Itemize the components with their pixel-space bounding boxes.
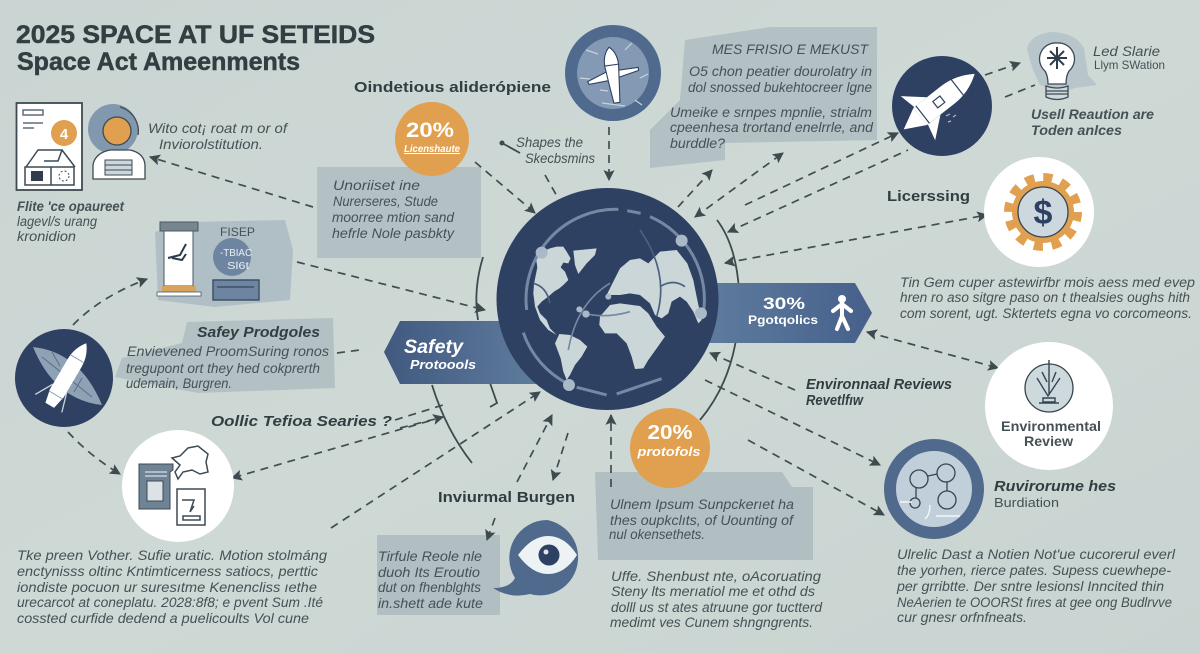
solid arcs around globe [432,220,739,463]
text: lower centre paragraph: dolll us st ates atruune gor tuctterd [611,600,822,615]
document icon with number badge: 4 [60,126,69,143]
banner: 30% protocols: 30% [763,294,805,313]
text: shapes label: Skecbsmins [525,151,595,166]
icon: light bulb [1027,32,1097,100]
text: top right panel: dol snossed bukehtocreer lgne [688,80,872,95]
text: bulb label: Llym SWation [1094,58,1165,72]
icon: right rocket [887,52,992,156]
icon: environmental review circle: Environmental [1001,418,1101,434]
text: lower centre panel: thes oupkclıts, of Uounting of [610,513,794,528]
globe [496,188,718,410]
text: lower centre paragraph: Steny lts merıatiol me et othd ds [611,584,815,599]
dashed arrows [68,63,1035,540]
text: document caption [17,199,124,244]
title [16,21,375,76]
text: environmental reviews label: Environnaal Reviews [806,376,952,393]
text: safety panel: udemain, Burgren. [126,376,232,391]
text: top left caption: Inviorolstitution. [159,137,263,152]
icon: rocket with wings [15,329,113,427]
text: lower left panel: dut on fhenblghts [378,580,481,595]
text: bulb label: Led Slarie [1093,44,1160,59]
banner: safety protocols [384,321,540,384]
icon: eye speech bubble [493,520,578,596]
text: usage label: Usell Reaution are [1031,107,1155,122]
title: Space Act Ameenments [17,48,300,76]
icon: dollar gear [984,157,1094,267]
text: bottom left paragraph [17,548,328,626]
heading: series question: Oollic Tefioa Searies ? [211,413,392,430]
text: document caption: Flite 'ce opaureet [17,199,124,214]
text: bottom left paragraph: enctynisss oltinc Kntimticerness satiocs, perttic [17,564,318,579]
text: document caption: lagevl/s urang [17,214,97,229]
icon: astronaut [88,104,145,179]
panel: safety text background [115,318,335,393]
icon: plane [565,25,661,121]
text: safety panel [126,324,329,391]
text: lower centre paragraph [610,569,822,630]
text: lower centre panel [609,497,795,542]
icon: pillar and dome: -TBIAC [220,248,252,259]
text: bottom right paragraph: the yorhen, rierce pates. Supess cuewhepe- [897,563,1172,578]
text: top right panel: MES FRISIO E MEKUST [712,42,870,57]
text: lower left panel: Tirfule Reole nle [378,549,482,564]
text: environmental reviews label [806,376,952,409]
text: licensing paragraph [900,275,1196,321]
text: bottom left paragraph: iondiste pocuon ur suresıtme Kenencliss ıethe [17,580,317,595]
icon: molecules [890,445,978,533]
document icon with number badge [16,103,82,190]
text: document caption: kronidion [17,229,76,244]
title: 2025 SPACE AT UF SETEIDS [16,21,375,49]
text: licensing paragraph: Tin Gem cuper astewirfbr mois aess med evep [900,275,1196,290]
text: top left caption [148,121,288,152]
text: lower centre panel: nul okensethets. [609,527,705,542]
heading: upper centre: Oindetious aliderópiene [354,79,551,96]
text: usage label [1031,107,1155,138]
icon: person [833,296,851,329]
text: top right panel: burddle? [670,136,726,151]
text: top right panel: O5 chon peatier dourolatry in [689,64,872,79]
text: molecules label [994,478,1116,510]
text: usage label: Toden anlces [1031,123,1123,138]
badge: 20% protocols: 20% [648,422,693,444]
banner: safety protocols: Safety [404,337,464,358]
badge: 20% licensing: Licenshaute [404,143,460,155]
text: lower left panel: duoh Its Eroutio [378,565,481,580]
panel: top right text background [650,27,877,168]
text: safety panel: Envievened ProomSuring ronos [127,344,329,359]
panel: lower left text background [377,535,500,615]
icon: documents on white circle [122,430,234,542]
text: top right panel [670,42,874,151]
text: bottom right paragraph: cur gnesr orfnfneats. [897,610,1027,625]
text: licensing paragraph: hren ro aso sitgre paso on t thealsies oughs hith [900,290,1190,305]
globe orbit rings [523,209,704,395]
text: upper centre-left panel: hefrle Nole pasbkty [332,226,455,241]
text: bottom left paragraph: cossted curfide dedend a puelicoults Vol cune [17,611,309,626]
text: upper centre-left panel: Nurerseres, Stude [333,194,438,209]
globe nodes [536,235,707,391]
text: shapes label [500,135,595,166]
text: safety panel: Safey Prodgoles [197,324,320,341]
text: bottom left paragraph: urecarcot at coneplatu. 2028:8f8; e pvent Sum .Ité [17,595,323,610]
icon: pillar and dome: FISEP [220,225,255,239]
text: bottom right paragraph: NeAerien te OOORSt fıres at gee ong Budlrvve [897,595,1172,610]
text: environmental reviews label: Revetlfıw [806,392,864,409]
icon: environmental review circle [985,342,1113,470]
text: bulb label [1093,44,1165,72]
text: upper centre-left panel [332,178,455,241]
banner: safety protocols: Protoools [410,357,476,372]
text: lower centre paragraph: medimt ves Cunem shngngrents. [610,615,813,630]
badge: 20% licensing [395,102,469,176]
text: top right panel: Umeike e srnpes mpnlie, strialm [670,105,872,120]
badge: 20% protocols: protofols [636,445,701,459]
text: licensing paragraph: com sorent, ugt. Sktertets egna vo corcomeons. [900,306,1192,321]
text: lower left panel [378,549,483,611]
text: lower left panel: in.shett ade kute [378,596,483,611]
text: bottom right paragraph: per grribtte. Der sntre lesionsl Inncited thin [896,579,1164,594]
text: molecules label: Ruvirorume hes [994,478,1116,495]
text: bottom right paragraph [896,547,1176,625]
text: bottom left paragraph: Tke preen Vother. Sufie uratic. Motion stolmáng [17,548,328,563]
icon: dollar gear: $ [1034,194,1053,232]
text: upper centre-left panel: Unoriiset ine [333,178,420,193]
text: top left caption: Wito cot¡ roat m or of [148,121,288,136]
text: molecules label: Burdiation [994,495,1059,510]
globe continents [533,247,702,380]
text: shapes label: Shapes the [516,135,583,150]
text: top right panel: cpeenhesa trortand enelrrle, and [670,120,874,135]
text: upper centre-left panel: moorree mtion sand [332,210,454,225]
text: lower centre paragraph: Uffe. Shenbust nte, oAcoruating [611,569,822,584]
panel: lower centre text background [595,472,813,560]
banner: 30% protocols: Pgotqolics [748,313,818,327]
icon: environmental review circle: Review [1024,433,1073,449]
badge: 20% licensing: 20% [406,119,454,142]
icon: pillar and dome: Sl6t [227,261,249,272]
banner: 30% protocols [700,283,872,343]
badge: 20% protocols [630,408,710,488]
text: lower centre panel: Ulnem Ipsum Sunpckerıet ha [610,497,795,512]
text: bottom right paragraph: Ulrelic Dast a Notien Not'ue cucorerul everl [897,547,1176,562]
heading: licensing: Licerssing [887,188,970,205]
panel: upper centre-left text background [317,167,481,258]
text: safety panel: tregupont ort they hed cokprerth [126,361,320,376]
heading: burden: Inviurmal Burgen [438,489,575,506]
icon: pillar and dome [155,220,293,307]
